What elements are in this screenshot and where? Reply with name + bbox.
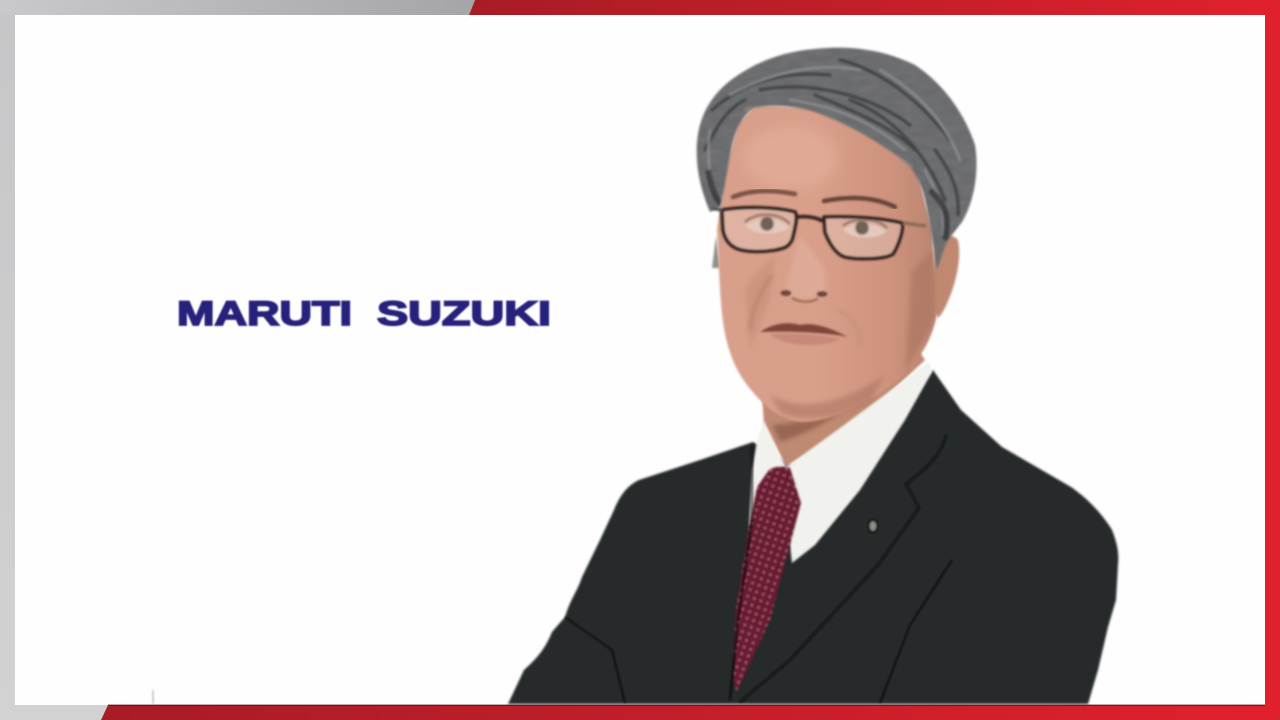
chin shadow — [770, 375, 885, 418]
eyes — [745, 215, 887, 238]
forehead highlight — [742, 126, 838, 190]
eyebrows — [733, 191, 895, 207]
logo: Maruti Suzuki wordmark — [177, 295, 551, 333]
mouth — [760, 323, 848, 345]
nasolabial folds — [750, 275, 860, 345]
neck — [762, 330, 925, 467]
lapel lines — [565, 435, 952, 703]
cheek shading — [745, 255, 775, 350]
lapel pin — [868, 520, 878, 532]
shirt collar — [749, 362, 932, 563]
suit jacket — [508, 370, 1118, 704]
logo: Maruti Suzuki wordmark: MARUTI — [177, 295, 352, 333]
faint photo edge mark — [152, 690, 154, 704]
portrait of executive — [508, 40, 1118, 704]
necktie — [733, 467, 801, 692]
hair — [690, 40, 985, 275]
glasses — [712, 208, 926, 259]
nose — [780, 235, 828, 302]
left ear sliver — [712, 236, 720, 268]
face — [717, 105, 937, 422]
logo: Maruti Suzuki wordmark: SUZUKI — [377, 295, 551, 333]
ear — [930, 233, 959, 318]
